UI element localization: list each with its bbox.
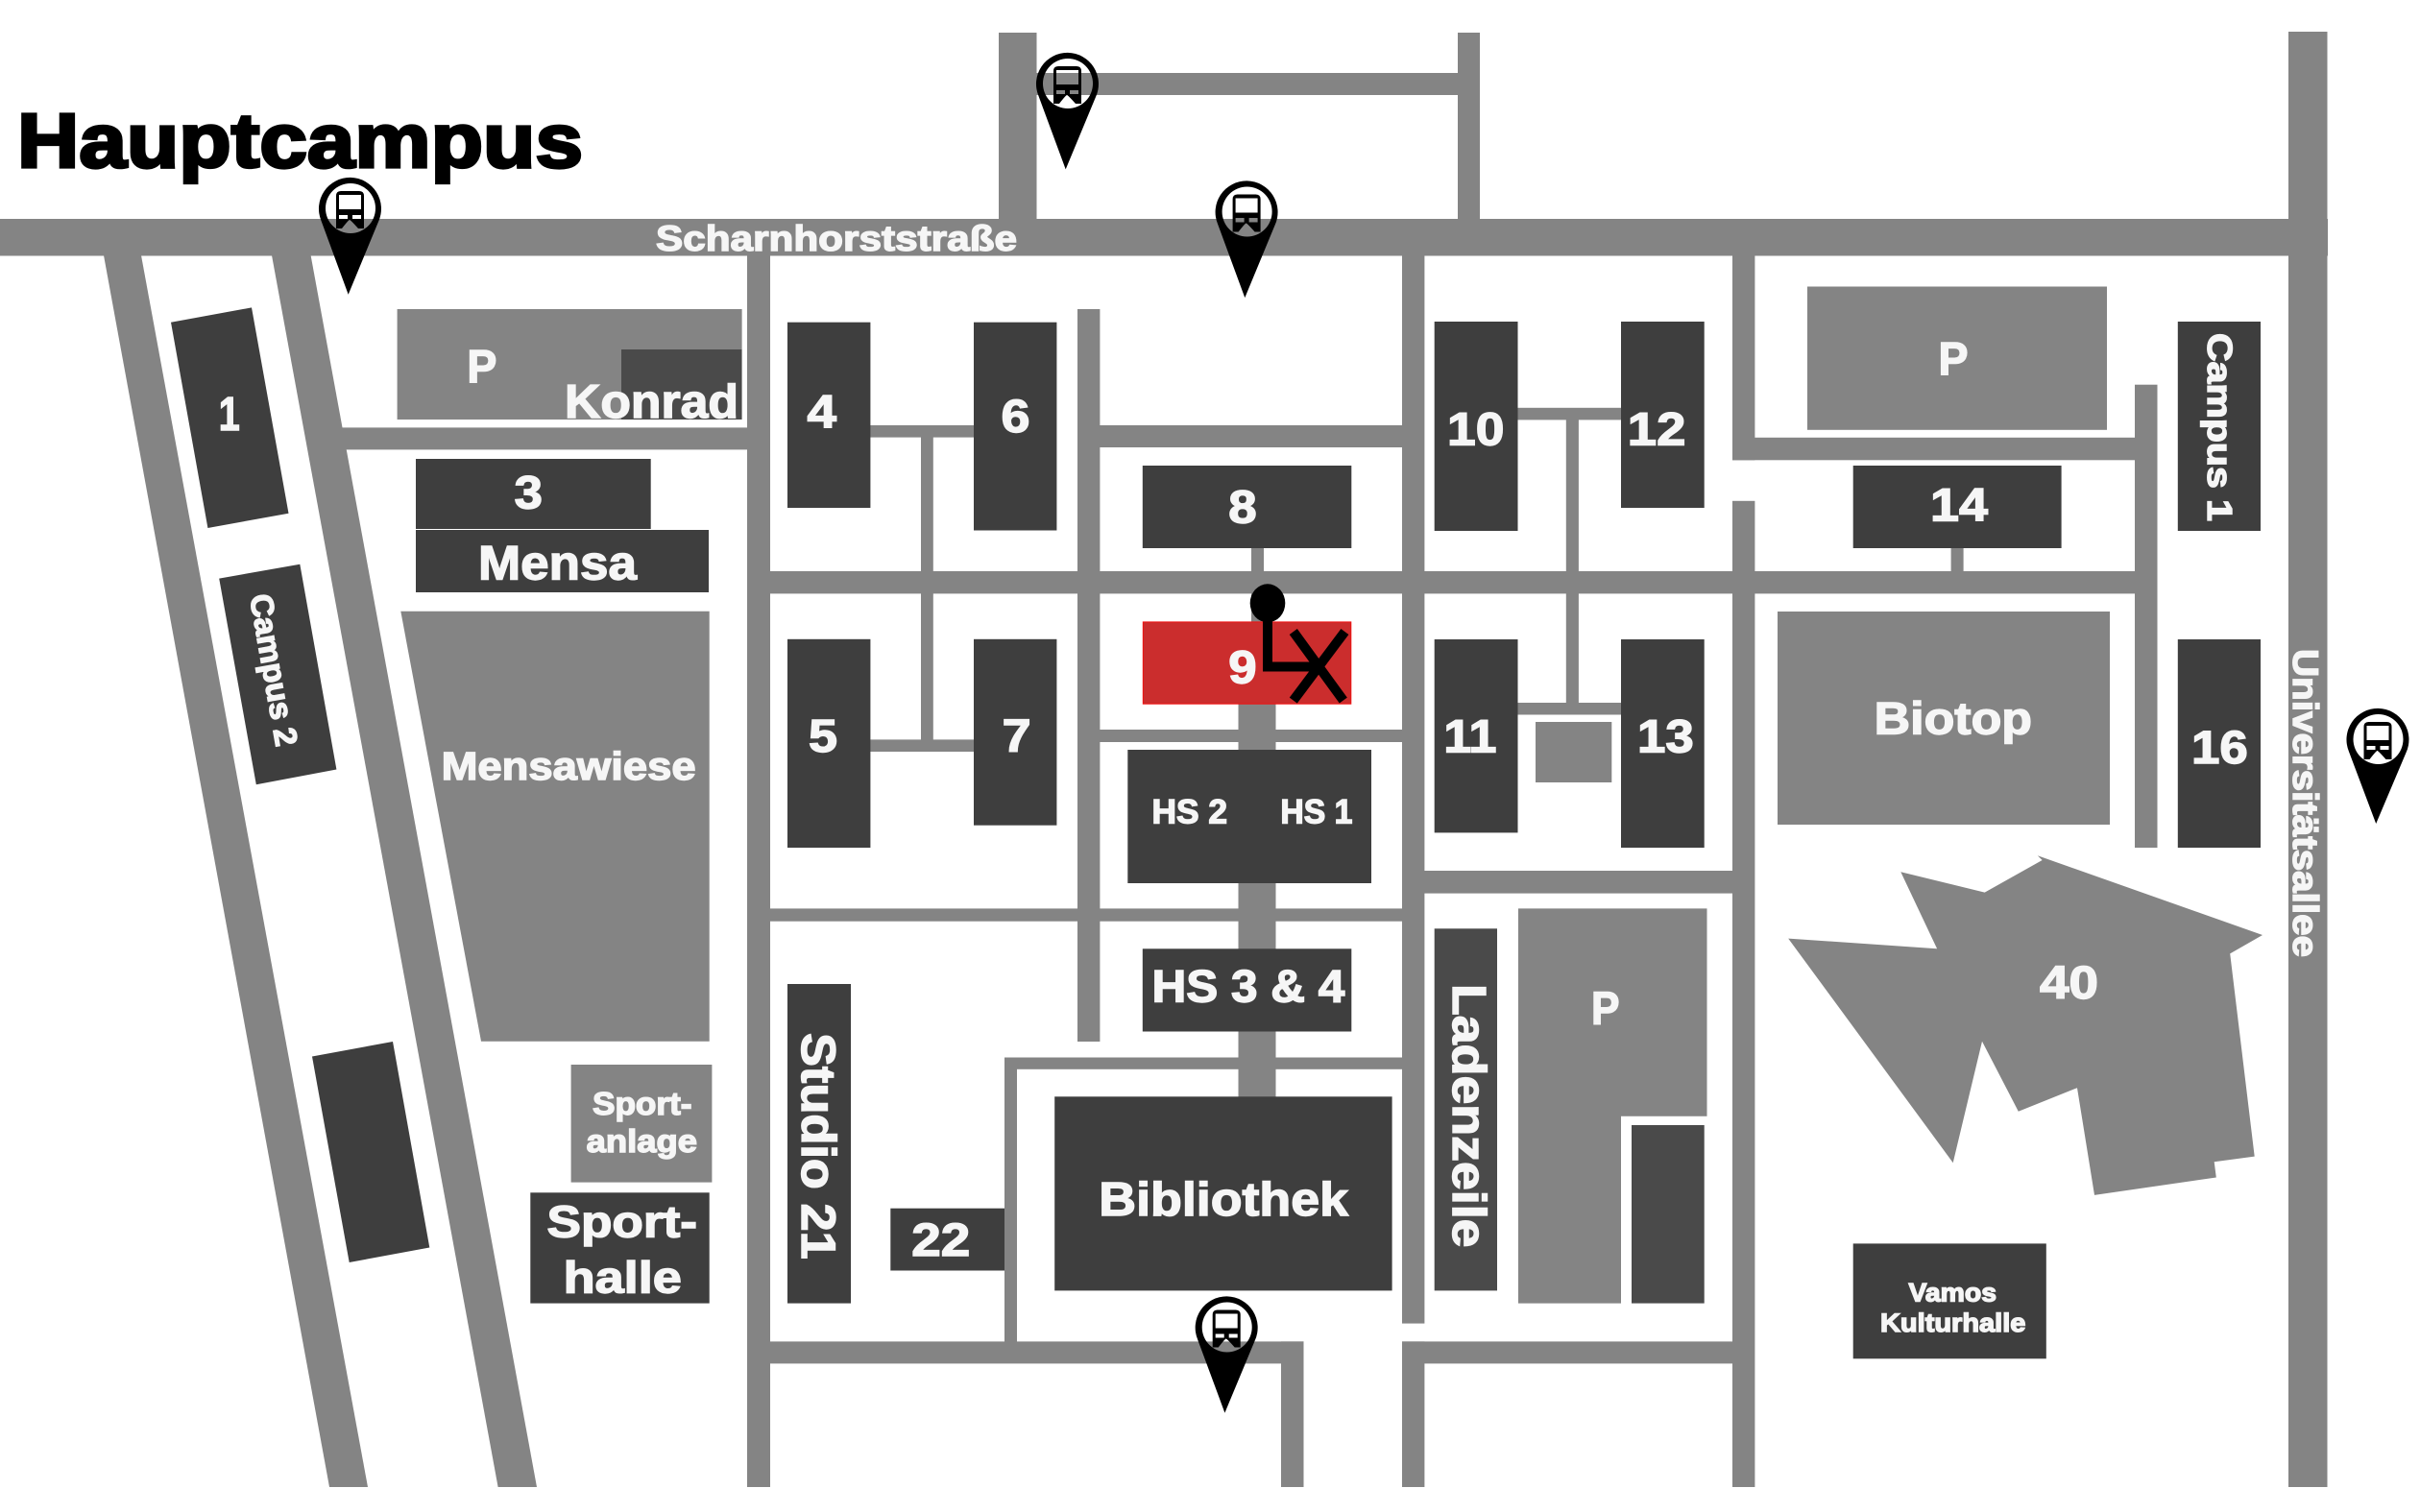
icon: bus stop pin north (1036, 53, 1099, 169)
street label: Universitätsallee: Universitätsallee (2286, 649, 2325, 957)
Vamos Kulturhalle: Vamos (1909, 1279, 1996, 1308)
Sportanlage: Sport- (593, 1086, 691, 1121)
Studio 21 (787, 984, 851, 1304)
parking north-east (1807, 286, 2107, 430)
Sporthalle: halle (564, 1252, 682, 1302)
building Campus 2: Campus 2 (243, 591, 304, 749)
street label: Scharnhorststraße: Scharnhorststraße (656, 219, 1017, 258)
building 22 (890, 1209, 1004, 1271)
building 3: 3 (515, 468, 543, 519)
building 6 (974, 323, 1056, 530)
building 11: 11 (1443, 711, 1496, 762)
building 7 (974, 639, 1056, 826)
building 14: 14 (1930, 480, 1988, 532)
parking south: P (1591, 983, 1619, 1034)
building 3 (416, 459, 651, 529)
Mensa (416, 530, 709, 592)
Sporthalle (530, 1192, 710, 1304)
building 40 (1788, 855, 2263, 1195)
HS 1 and HS 2 block (1127, 750, 1371, 883)
icon: location marker on building 9 (1250, 584, 1344, 701)
building 6: 6 (1001, 392, 1029, 443)
building 4: 4 (807, 387, 836, 438)
Mensawiese: Mensawiese (442, 744, 696, 788)
building 1: 1 (219, 389, 240, 441)
building 8: 8 (1228, 482, 1257, 534)
building 22: 22 (911, 1215, 970, 1266)
building 10 (1435, 322, 1517, 531)
parking south (1518, 908, 1707, 1304)
Ladenzeile (1435, 928, 1497, 1290)
Sporthalle: Sport- (547, 1196, 697, 1246)
building 13: 13 (1637, 711, 1694, 762)
building 14 (1853, 466, 2062, 548)
building 16: 16 (2191, 723, 2248, 774)
HS 3 and 4 (1143, 948, 1351, 1031)
Ladenzeile: Ladenzeile (1442, 984, 1494, 1248)
Bibliothek (1054, 1096, 1392, 1290)
small grey courtyard (1536, 722, 1611, 782)
building 7: 7 (1003, 711, 1031, 762)
HS 3 and 4: HS 3 & 4 (1152, 960, 1344, 1011)
icon: bus stop pin Scharnhorststraße (1216, 180, 1278, 298)
Campus 1 (2178, 322, 2261, 531)
parking and Konrad: P (467, 342, 496, 393)
parking north-east: P (1938, 334, 1969, 385)
unnamed building on the west strip (312, 1042, 429, 1262)
HS 1 and HS 2 block: HS 1 (1280, 794, 1352, 831)
building 5 (787, 639, 870, 848)
building 11 (1435, 639, 1517, 832)
Biotop: Biotop (1875, 693, 2032, 744)
building 12 (1621, 322, 1705, 508)
building 9 highlighted (1143, 622, 1351, 704)
HS 1 and HS 2 block: HS 2 (1152, 794, 1227, 831)
title: Hauptcampus (17, 98, 583, 183)
building 13 (1621, 639, 1705, 848)
Studio 21: Studio 21 (791, 1033, 845, 1260)
icon: bus stop pin south (1196, 1296, 1258, 1413)
building 1 (171, 307, 288, 528)
building 4 (787, 323, 870, 508)
Vamos Kulturhalle: Kulturhalle (1880, 1308, 2025, 1337)
Mensa: Mensa (478, 537, 638, 590)
building 40: 40 (2040, 958, 2098, 1009)
building 8 (1143, 466, 1351, 548)
small dark building beside parking (1632, 1125, 1705, 1304)
icon: bus stop pin west (319, 178, 381, 295)
Bibliothek: Bibliothek (1099, 1174, 1349, 1226)
Campus 1: Campus 1 (2200, 333, 2239, 521)
Mensawiese (400, 612, 710, 1042)
building 12: 12 (1628, 404, 1685, 455)
building Campus 2 (219, 564, 336, 784)
parking and Konrad: Konrad (565, 376, 738, 428)
building 16 (2178, 639, 2261, 848)
icon: bus stop pin east (2346, 708, 2408, 824)
Sportanlage: anlage (587, 1123, 697, 1159)
Sportanlage (571, 1065, 712, 1183)
parking and Konrad (398, 309, 742, 428)
Vamos Kulturhalle (1853, 1243, 2046, 1358)
building 10: 10 (1447, 404, 1504, 455)
building 5: 5 (809, 711, 837, 762)
building 9 highlighted: 9 (1228, 643, 1257, 694)
Biotop (1778, 612, 2110, 825)
